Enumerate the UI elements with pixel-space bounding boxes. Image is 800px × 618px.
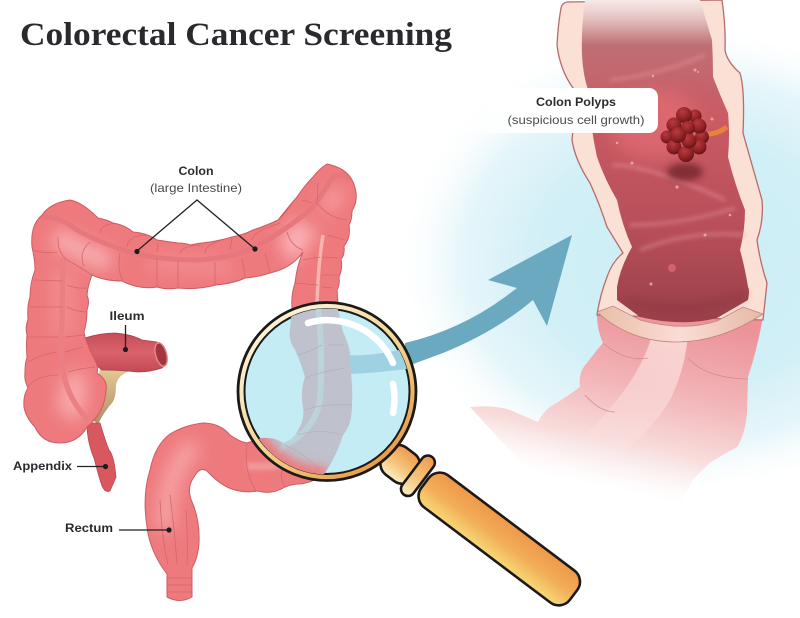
lens glass [244,309,410,474]
callout: colon polyps [450,88,658,133]
interior folds and highlights [610,55,745,308]
label: rectum: Rectum [65,521,113,535]
colon central bands [40,175,350,260]
callout box [450,88,658,133]
colon heading: Colon [178,164,214,178]
background glow [395,25,800,495]
mesentery [90,368,133,424]
ileum [85,333,170,372]
colon segment folds [27,183,347,491]
callout subtext: (suspicious cell growth) [508,113,644,127]
colon highlights [27,175,350,592]
lens frame [238,302,416,480]
lens highlights [308,320,393,363]
label: appendix [13,459,108,473]
colon large intestine [24,164,356,600]
label: ileum [110,309,144,352]
cut ring [597,306,763,342]
colon interior [582,0,749,322]
handle [372,433,589,613]
label: ileum: Ileum [110,309,144,323]
label: rectum [65,521,172,535]
callout heading: Colon Polyps [536,95,616,109]
appendix [87,423,116,491]
label: appendix: Appendix [13,459,72,473]
magnifying glass [238,300,589,613]
colon wall [557,0,767,320]
polyp stalk [705,127,727,134]
title: Colorectal Cancer Screening [20,17,453,53]
label: colon [134,164,258,254]
zoomed colon section [470,0,767,505]
polyp shadow [667,163,703,181]
lower colon tube [470,315,763,505]
colon subtext: (large Intestine) [150,181,242,195]
arrow [405,235,572,367]
lens contents [259,308,407,474]
polyp cluster [660,107,709,162]
colon leader lines [134,200,258,254]
